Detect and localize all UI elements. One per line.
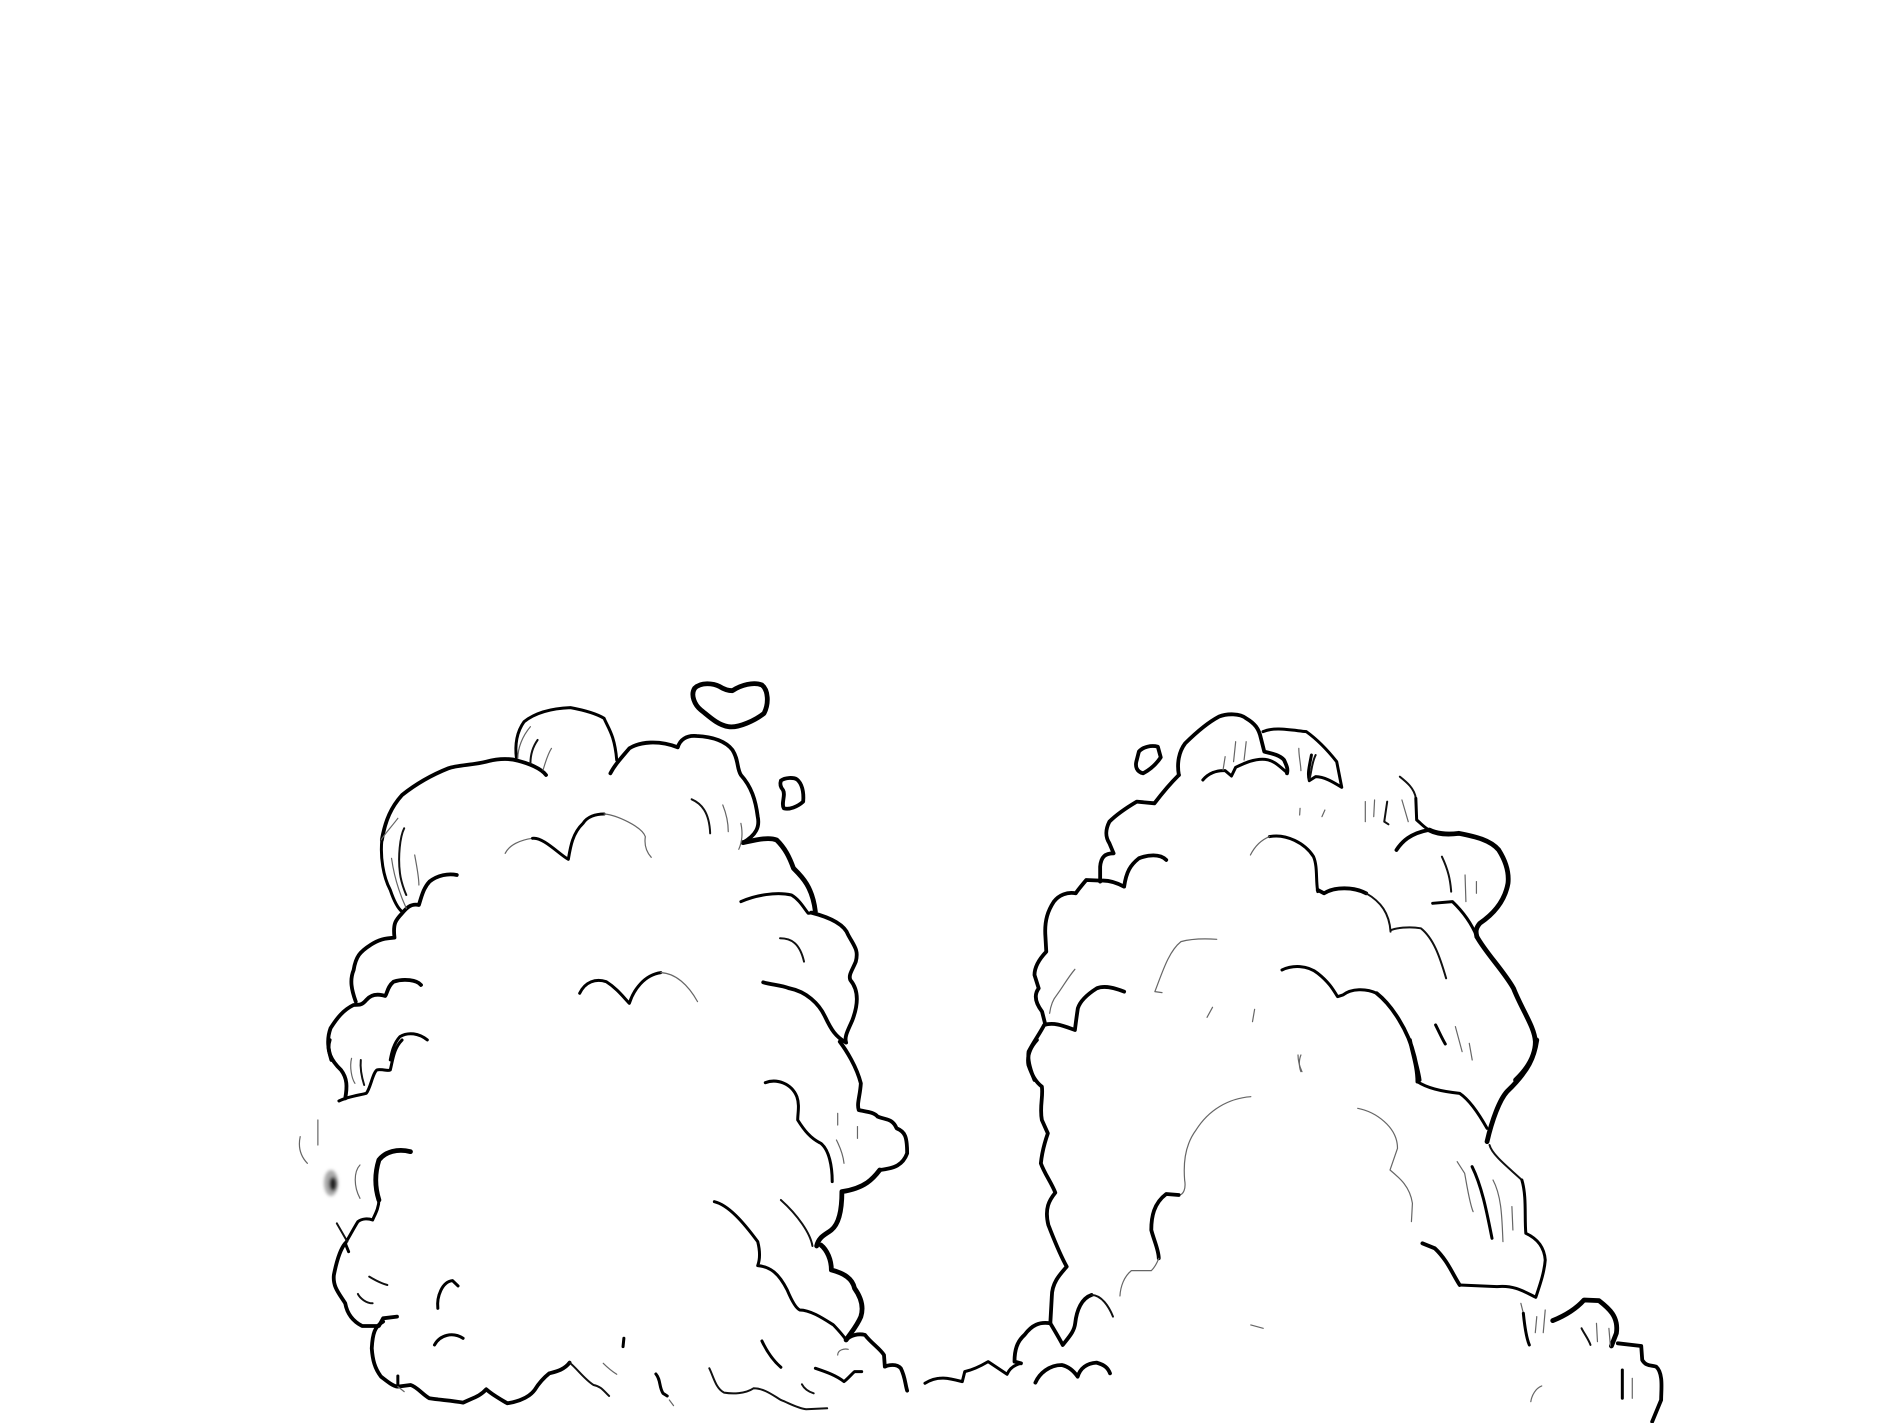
left-side contours bbox=[376, 1150, 410, 1200]
base lines bbox=[815, 1368, 862, 1382]
left cloud: lower part bbox=[299, 1040, 940, 1409]
right cloud bbox=[925, 714, 1662, 1422]
right cloud: upper part bbox=[1028, 714, 1535, 1080]
left cloud: upper part bbox=[328, 684, 857, 1060]
right cloud: lower part bbox=[925, 1040, 1662, 1422]
top bump bbox=[516, 708, 617, 760]
small floating puff bbox=[780, 778, 803, 809]
floating heart-shaped puff bbox=[693, 684, 767, 727]
smudge mark bbox=[324, 1170, 338, 1196]
small floating puff bbox=[1136, 746, 1161, 773]
lower-right puff bbox=[1553, 1300, 1617, 1346]
right-side contours bbox=[840, 1042, 907, 1170]
inner arch bbox=[1179, 1097, 1251, 1195]
crown of the cloud bbox=[1178, 714, 1287, 775]
left cloud bbox=[299, 684, 940, 1409]
